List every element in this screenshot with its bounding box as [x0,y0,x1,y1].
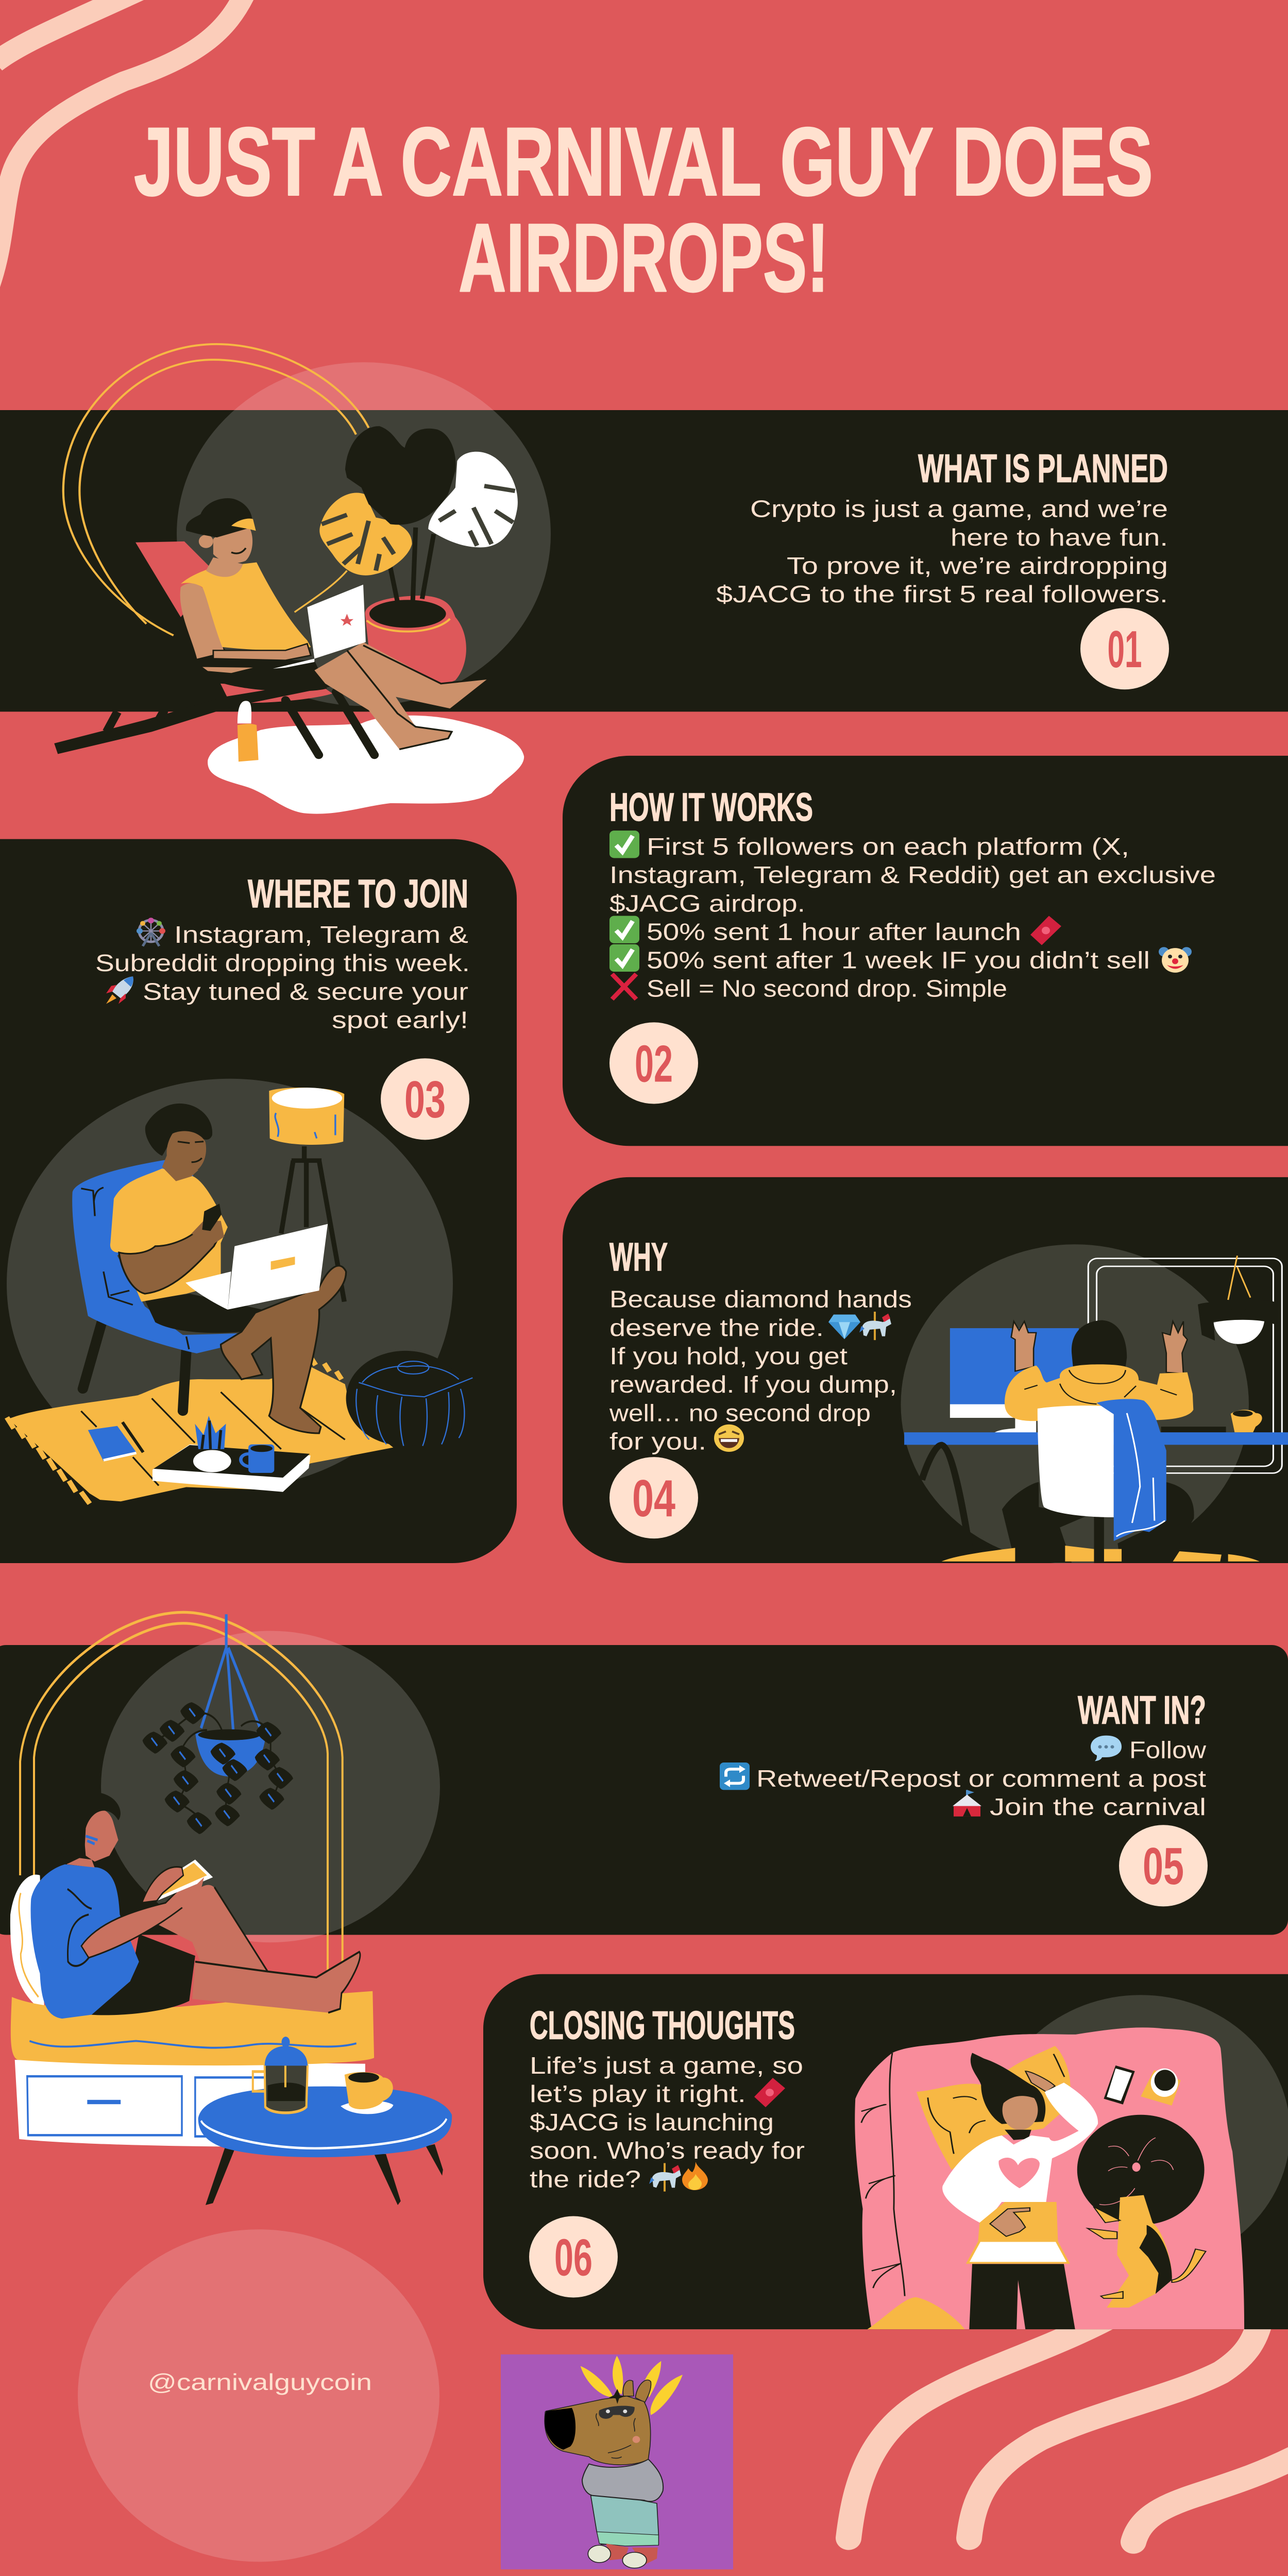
illustration: man in blue armchair with laptop [7,1088,472,1504]
badge 03: 03 [404,1071,446,1129]
illustration: person at desk with peace signs [901,1244,1288,1564]
text block: why: for you. [609,1429,706,1455]
illustration: woman lying on pink bed with cat [855,1995,1288,2329]
heading: closing thoughts: CLOSING THOUGHTS [530,2004,795,2048]
text block: where to join [95,918,470,1033]
text block: closing thoughts [530,2053,805,2193]
text block: closing thoughts: Life’s just a game, so [530,2053,803,2079]
illustration: woman on deck chair with laptop and plants [54,344,524,814]
decorative waves: bottom right [849,2311,1288,2542]
text block: what is planned: $JACG to the first 5 real followers. [716,582,1168,608]
backdrop circle 3 [7,1079,453,1489]
mascot: carnival dog on purple square [501,2354,733,2569]
text block: how it works: 50% sent after 1 week IF you didn’t sell [647,947,1150,974]
text block: how it works: 50% sent 1 hour after launch [647,919,1021,945]
badge 01: 01 [1108,620,1142,679]
text block: closing thoughts: let’s play it right. [530,2081,746,2107]
badge 02: 02 [635,1035,673,1093]
badge 06 [529,2216,618,2298]
heading: where to join: WHERE TO JOIN [248,872,468,916]
decorative waves: top left [0,0,246,284]
badge 04 [609,1457,698,1538]
title [134,107,1153,312]
backdrop circle 5 [101,1631,440,1942]
text block: want in: Retweet/Repost or comment a post [756,1766,1206,1792]
text block: why: If you hold, you get [609,1344,848,1370]
badge 05 [1119,1825,1208,1906]
panel: why [563,1177,1288,1564]
badge 05: 05 [1143,1837,1184,1895]
text block: how it works: Sell = No second drop. Simple [647,976,1007,1002]
text block: why: rewarded. If you dump, [609,1372,897,1398]
badge 02 [609,1022,698,1104]
heading: want in: WANT IN? [1078,1688,1206,1733]
text block: want in [720,1736,1206,1821]
handle text: @carnivalguycoin [148,2369,372,2395]
text block: how it works [609,831,1216,1002]
heading: why: WHY [609,1235,668,1279]
badge 03 [381,1058,469,1140]
text block: how it works: First 5 followers on each platform (X, [647,834,1129,860]
panel: where to join [0,839,517,1563]
panel: how it works [563,756,1288,1146]
panel: closing thoughts [483,1974,1288,2329]
text block: why: well… no second drop [609,1400,871,1427]
text block: what is planned: Crypto is just a game, and we’re [750,496,1168,522]
title: AIRDROPS! [459,204,829,312]
text block: closing thoughts: $JACG is launching [530,2110,774,2136]
text block: closing thoughts: soon. Who’s ready for [530,2138,805,2164]
text block: why: Because diamond hands [609,1286,912,1313]
social handle circle [78,2229,439,2562]
panel: what is planned [0,344,1288,814]
text block: where to join: spot early! [332,1007,468,1033]
text block: want in: Follow [1129,1737,1206,1764]
text block: why: deserve the ride. [609,1315,824,1341]
text block: what is planned: To prove it, we’re airdropping [787,553,1168,579]
backdrop circle 1 [177,362,551,706]
text block: want in: Join the carnival [990,1794,1206,1821]
text block: where to join: Subreddit dropping this week. [95,951,470,977]
illustration: woman reading on window seat with hanging plant [10,1612,452,2205]
panel: want in [0,1612,1288,2205]
heading: how it works: HOW IT WORKS [609,785,813,829]
text block: where to join: Stay tuned & secure your [143,979,468,1005]
text block: closing thoughts: the ride? [530,2166,641,2193]
text block: what is planned [716,496,1168,608]
text block: what is planned: here to have fun. [951,525,1168,551]
badge 06: 06 [554,2228,592,2286]
badge 01 [1080,608,1169,689]
text block: why [609,1286,912,1455]
text block: where to join: Instagram, Telegram & [174,922,468,948]
text block: how it works: Instagram, Telegram & Reddit) get an exclusive [609,862,1216,889]
badge 04: 04 [632,1469,675,1528]
text block: how it works: $JACG airdrop. [609,891,805,917]
